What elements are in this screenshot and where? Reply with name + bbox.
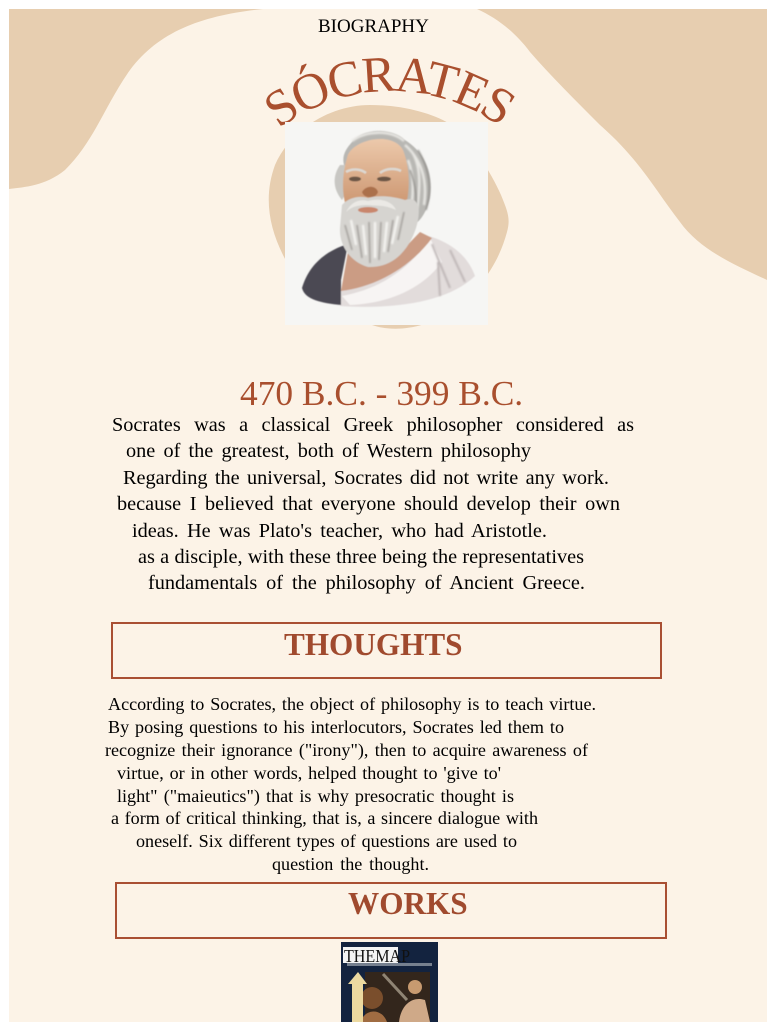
- biography paragraph: fundamentals of the philosophy of Ancient Greece.: [148, 572, 585, 594]
- cover arrow: [348, 972, 367, 1022]
- dates: 470 B.C. - 399 B.C.: [240, 373, 523, 413]
- title: Sócrates arched: SÓCRATES: [266, 58, 515, 126]
- biography paragraph: one of the greatest, both of Western philosophy: [126, 440, 531, 462]
- thoughts paragraph: question the thought.: [272, 854, 429, 874]
- thoughts paragraph: virtue, or in other words, helped thought to 'give to': [117, 763, 501, 783]
- biography paragraph: as a disciple, with these three being the representatives: [138, 546, 584, 568]
- heading: thoughts: THOUGHTS: [284, 627, 463, 662]
- thoughts paragraph: By posing questions to his interlocutors, Socrates led them to: [108, 717, 564, 737]
- book cover: [341, 942, 438, 1022]
- beard: [340, 196, 419, 267]
- hair back: [343, 131, 431, 226]
- portrait of Socrates: [285, 122, 488, 325]
- biography paragraph: because I believed that everyone should develop their own: [117, 493, 620, 515]
- moustache and mouth: [346, 200, 396, 212]
- section box: works: [115, 882, 667, 939]
- thoughts paragraph: oneself. Six different types of questions are used to: [136, 831, 517, 851]
- hair strands: [352, 133, 425, 218]
- cover painting: [361, 972, 430, 1022]
- face: [343, 139, 409, 212]
- brows and eyes: [346, 169, 401, 173]
- dark cloak: [302, 244, 348, 305]
- biography paragraph: Regarding the universal, Socrates did not write any work.: [123, 467, 609, 489]
- thoughts paragraph: According to Socrates, the object of philosophy is to teach virtue.: [108, 694, 596, 714]
- thoughts paragraph: light" ("maieutics") that is why presocratic thought is: [117, 786, 514, 806]
- thoughts paragraph: recognize their ignorance ("irony"), then to acquire awareness of: [105, 740, 588, 760]
- biography paragraph: [112, 414, 634, 594]
- thoughts paragraph: a form of critical thinking, that is, a sincere dialogue with: [111, 808, 538, 828]
- nose: [362, 187, 378, 197]
- heading: works: WORKS: [348, 886, 468, 921]
- thoughts paragraph: [105, 694, 596, 874]
- label: biography: BIOGRAPHY: [318, 16, 429, 37]
- biography paragraph: ideas. He was Plato's teacher, who had Aristotle.: [132, 520, 547, 542]
- section box: thoughts: [111, 622, 662, 679]
- toga: [340, 234, 475, 307]
- neck and chest: [341, 232, 432, 291]
- biography paragraph: Socrates was a classical Greek philosopher considered as: [112, 414, 634, 436]
- cover title: THEMAP: [344, 946, 410, 966]
